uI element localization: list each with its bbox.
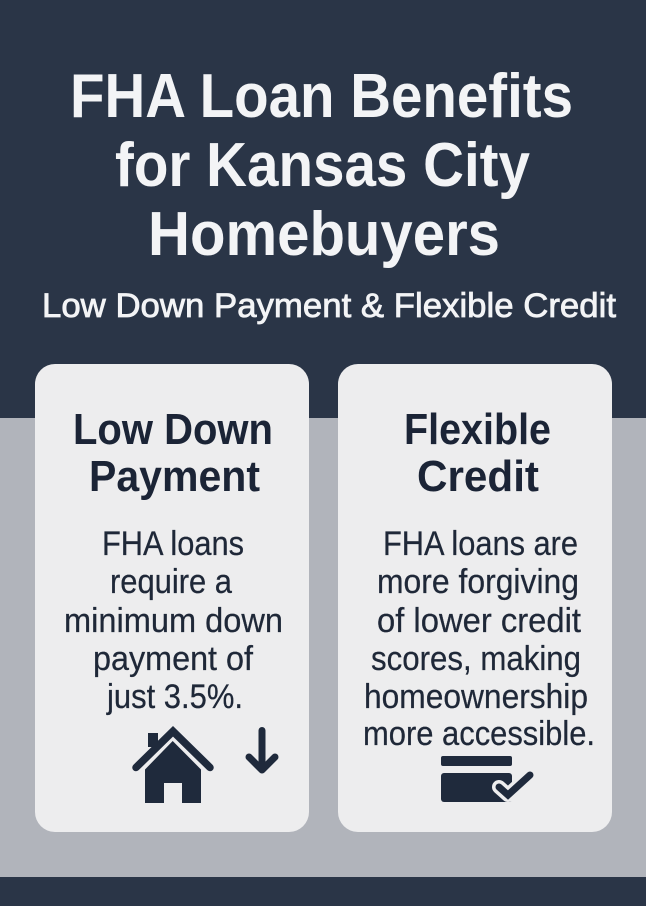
icon: credit card with check mark: [441, 756, 530, 802]
icon: down arrow: [249, 730, 275, 770]
text block: flexible credit description: FHA loans are: [383, 525, 578, 563]
text block: flexible credit description: more accessible.: [363, 715, 595, 753]
heading: low down payment: Low Down: [73, 405, 273, 454]
text block: flexible credit description: [363, 525, 595, 753]
background: grey middle band: [0, 418, 646, 877]
title: [70, 62, 573, 269]
subtitle: Low Down Payment & Flexible Credit: [42, 287, 616, 325]
text block: flexible credit description: more forgiving: [377, 563, 579, 601]
heading: low down payment: Payment: [89, 452, 260, 501]
panel: low down payment: [35, 364, 309, 832]
background: dark header band: [0, 0, 646, 418]
text block: low down payment description: payment of: [93, 640, 254, 678]
icon: house: [136, 731, 210, 803]
heading: flexible credit: Credit: [417, 452, 539, 501]
text block: flexible credit description: of lower credit: [377, 602, 582, 640]
text block: flexible credit description: homeownership: [364, 678, 588, 716]
text block: low down payment description: minimum down: [64, 602, 283, 640]
text block: low down payment description: [64, 525, 283, 716]
heading: flexible credit: [404, 405, 551, 501]
text block: low down payment description: just 3.5%.: [106, 678, 243, 716]
title: FHA Loan Benefits: [70, 62, 573, 131]
heading: low down payment: [73, 405, 273, 501]
card background: low down payment: [35, 364, 309, 832]
background: dark footer band: [0, 877, 646, 906]
title: Homebuyers: [148, 200, 500, 269]
text block: low down payment description: FHA loans: [102, 525, 244, 563]
text block: flexible credit description: scores, making: [371, 640, 581, 678]
panel: flexible credit: [338, 364, 612, 832]
text block: low down payment description: require a: [110, 563, 232, 601]
title: for Kansas City: [115, 131, 530, 200]
heading: flexible credit: Flexible: [404, 405, 551, 454]
card background: flexible credit: [338, 364, 612, 832]
